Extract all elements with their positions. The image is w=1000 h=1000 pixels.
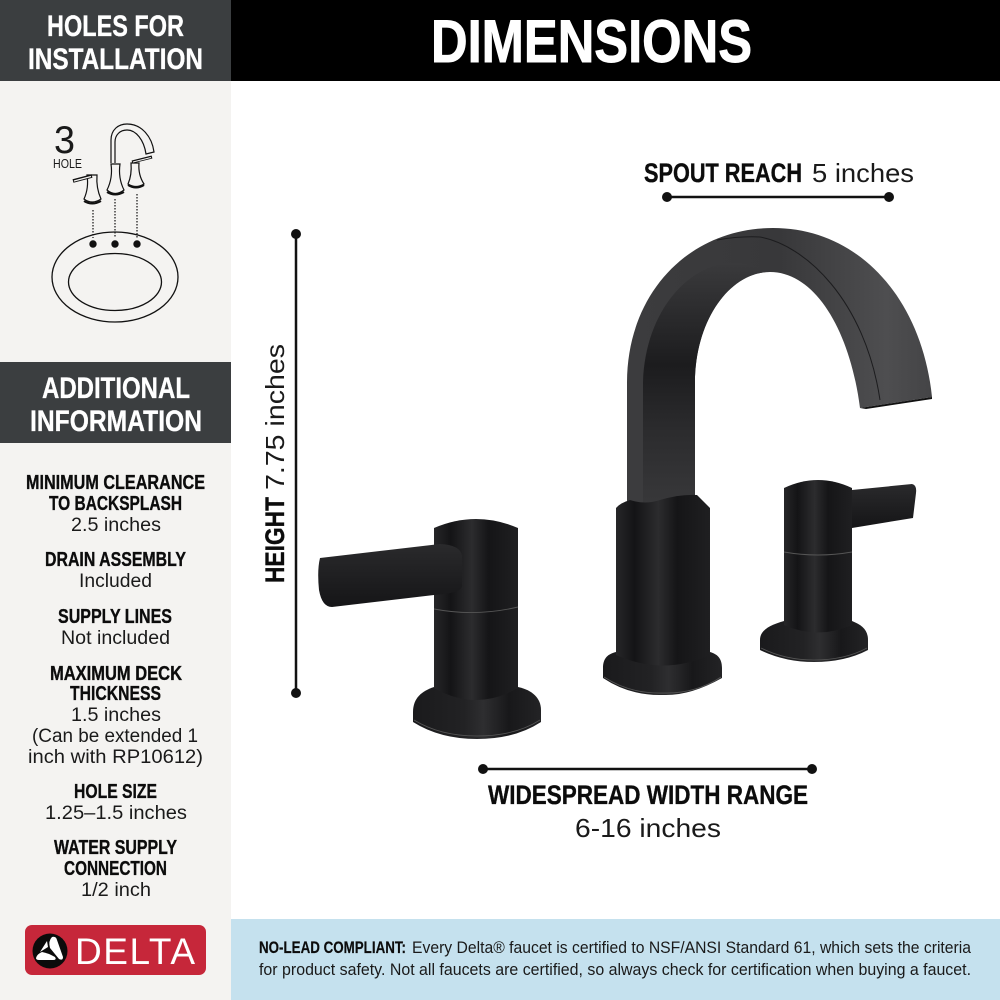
label: height: HEIGHT [260, 497, 290, 583]
logo: Delta: DELTA [75, 931, 195, 972]
label: height [260, 229, 301, 698]
label: spout reach: SPOUT REACH [644, 158, 802, 188]
text block: additional information list: WATER SUPPLY [54, 837, 178, 859]
text block: additional information list: Not included [61, 628, 170, 649]
text block: additional information list: 1.5 inches [71, 705, 161, 726]
label: widespread width range: 6-16 inches [575, 813, 721, 843]
title: dimensions [231, 0, 1000, 81]
text block: additional information list: DRAIN ASSEMBLY [45, 549, 187, 571]
text block: additional information list: Included [79, 571, 152, 592]
header: additional information: INFORMATION [30, 405, 202, 438]
title: dimensions: DIMENSIONS [431, 8, 752, 75]
callout: no-lead compliant [231, 919, 1000, 1000]
left handle [318, 519, 541, 739]
label: spout reach [644, 158, 914, 202]
panel: sidebar [0, 0, 231, 1000]
text block: additional information list: inch with RP10612) [28, 747, 203, 768]
callout: no-lead compliant: NO-LEAD COMPLIANT: [259, 938, 406, 957]
header: holes for installation: INSTALLATION [28, 43, 203, 76]
logo: Delta [25, 925, 206, 975]
header: additional information [0, 362, 231, 443]
right handle [760, 480, 916, 662]
spout [627, 228, 932, 510]
text block: additional information list [26, 472, 205, 901]
callout: no-lead compliant: Every Delta® faucet is certified to NSF/ANSI Standard 61, which sets the criteria [412, 938, 971, 957]
text block: additional information list: (Can be extended 1 [32, 726, 198, 747]
text block: additional information list: 1.25–1.5 inches [45, 803, 187, 824]
text block: additional information list: SUPPLY LINES [58, 606, 172, 628]
text block: additional information list: MAXIMUM DECK [50, 663, 182, 685]
icon: three hole sink diagram: HOLE [53, 157, 82, 171]
icon: three hole sink diagram [52, 119, 178, 322]
label: spout reach: 5 inches [812, 158, 914, 188]
text block: additional information list: HOLE SIZE [74, 781, 157, 803]
text block: additional information list: THICKNESS [70, 683, 161, 705]
text block: additional information list: 1/2 inch [81, 880, 151, 901]
text block: additional information list: CONNECTION [64, 858, 167, 880]
text block: additional information list: TO BACKSPLASH [49, 493, 182, 515]
header: holes for installation [0, 0, 231, 81]
callout: no-lead compliant: for product safety. Not all faucets are certified, so always check for certification when buying a faucet. [259, 960, 971, 979]
label: widespread width range [478, 764, 817, 843]
center faucet body [603, 495, 722, 695]
text block: additional information list: 2.5 inches [71, 515, 161, 536]
label: height: 7.75 inches [260, 344, 290, 490]
label: widespread width range: WIDESPREAD WIDTH RANGE [488, 780, 808, 810]
header: holes for installation: HOLES FOR [47, 10, 184, 43]
text block: additional information list: MINIMUM CLEARANCE [26, 472, 205, 494]
image: faucet [318, 228, 932, 739]
icon: three hole sink diagram: 3 [54, 119, 75, 162]
header: additional information: ADDITIONAL [42, 372, 190, 405]
